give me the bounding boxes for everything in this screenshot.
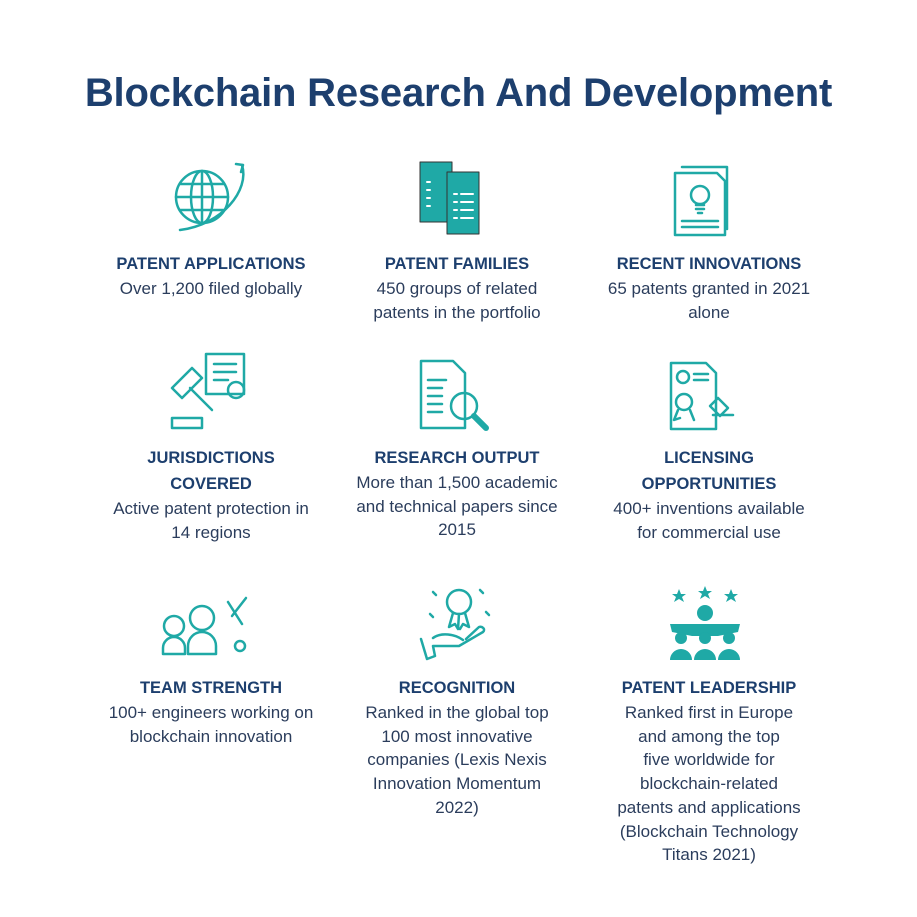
icon: team [162, 596, 248, 656]
panel: patent leadership: patents and applications [617, 798, 801, 817]
panel: jurisdictions covered: COVERED [170, 475, 252, 493]
panel: patent applications: Over 1,200 filed globally [120, 279, 302, 298]
panel: research output: RESEARCH OUTPUT [374, 449, 540, 467]
icon: globe [174, 162, 245, 232]
panel: recent innovations [608, 255, 810, 322]
panel: recognition: RECOGNITION [399, 679, 515, 697]
panel: research output: and technical papers since [356, 497, 558, 516]
icon: innovation document [674, 166, 728, 236]
panel: team strength [109, 679, 313, 746]
panel: licensing opportunities: 400+ inventions available [613, 499, 805, 518]
panel: licensing opportunities: LICENSING [664, 449, 754, 467]
panel: team strength: TEAM STRENGTH [140, 679, 282, 697]
panel: patent families [373, 255, 541, 322]
panel: jurisdictions covered: Active patent protection in [113, 499, 309, 518]
panel: recognition [365, 679, 549, 817]
panel: patent families: PATENT FAMILIES [385, 255, 529, 273]
icon: document magnifier [420, 360, 489, 431]
icon: leadership [670, 586, 740, 660]
icon: patent documents [420, 162, 480, 234]
panel: patent applications: PATENT APPLICATIONS [116, 255, 306, 273]
panel: research output [356, 449, 558, 539]
panel: team strength: 100+ engineers working on [109, 703, 313, 722]
icon: gavel [170, 352, 246, 430]
panel: patent leadership: Titans 2021) [662, 845, 756, 864]
panel: patent families: 450 groups of related [377, 279, 537, 298]
panel: research output: 2015 [438, 520, 476, 539]
panel: research output: More than 1,500 academic [356, 473, 558, 492]
panel: jurisdictions covered: JURISDICTIONS [147, 449, 275, 467]
panel: licensing opportunities: OPPORTUNITIES [642, 475, 776, 493]
panel: jurisdictions covered [113, 449, 309, 542]
panel: licensing opportunities [613, 449, 805, 542]
panel: recognition: 100 most innovative [381, 727, 533, 746]
icon: award hand [420, 588, 490, 660]
panel: patent leadership: blockchain-related [640, 774, 778, 793]
panel: recognition: companies (Lexis Nexis [367, 750, 547, 769]
panel: recognition: 2022) [435, 798, 479, 817]
panel: recent innovations: alone [688, 303, 730, 322]
panel: patent leadership: PATENT LEADERSHIP [622, 679, 796, 697]
panel: patent leadership: (Blockchain Technology [620, 822, 798, 841]
panel: patent leadership [617, 679, 801, 864]
panel: jurisdictions covered: 14 regions [171, 523, 251, 542]
panel: team strength: blockchain innovation [130, 727, 292, 746]
panel: patent applications [116, 255, 306, 298]
panel: patent leadership: five worldwide for [643, 750, 775, 769]
panel: recent innovations: 65 patents granted in 2021 [608, 279, 810, 298]
panel: patent families: patents in the portfolio [373, 303, 541, 322]
panel: patent leadership: and among the top [638, 727, 780, 746]
panel: recent innovations: RECENT INNOVATIONS [617, 255, 801, 273]
icon: certificate stamp [670, 362, 734, 430]
panel: patent leadership: Ranked first in Europe [625, 703, 793, 722]
panel: recognition: Innovation Momentum [373, 774, 541, 793]
title: Blockchain Research And Development [85, 71, 832, 115]
panel: licensing opportunities: for commercial use [637, 523, 781, 542]
panel: recognition: Ranked in the global top [365, 703, 549, 722]
